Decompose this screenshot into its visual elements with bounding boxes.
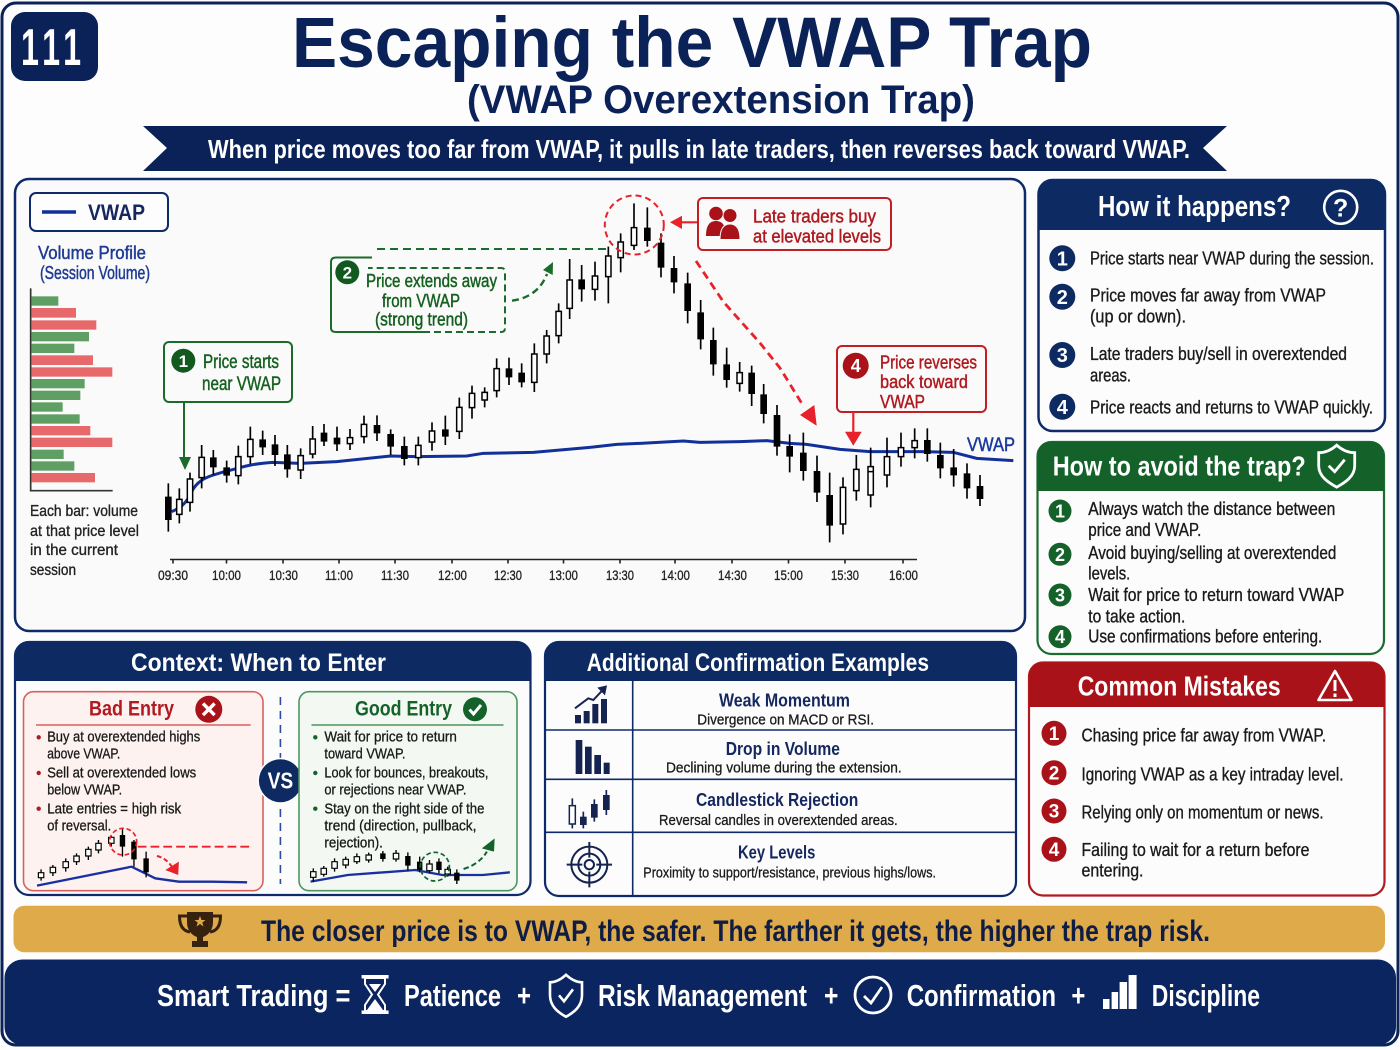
- card: good entry: or rejections near VWAP.: [324, 782, 466, 798]
- card: good entry: [299, 692, 517, 891]
- mistakes list: Ignoring VWAP as a key intraday level.: [1082, 765, 1344, 785]
- steps list: (up or down).: [1090, 307, 1186, 327]
- callout 4: price reverses back toward VWAP: 4: [851, 356, 861, 376]
- callout 4: price reverses back toward VWAP: VWAP: [880, 392, 925, 412]
- avoid list: Avoid buying/selling at overextended: [1088, 543, 1336, 563]
- panel: common mistakes: [1029, 662, 1384, 896]
- volume profile caption: Each bar: volume: [30, 503, 138, 520]
- row: weak momentum: Weak Momentum: [719, 691, 850, 711]
- heading: How it happens?: [1098, 191, 1291, 223]
- card: bad entry: below VWAP.: [47, 782, 122, 798]
- formula text: Discipline: [1152, 978, 1260, 1013]
- icon: hourglass: [362, 975, 389, 1014]
- legend: VWAP line: VWAP: [88, 200, 145, 225]
- mistakes list: [1042, 721, 1344, 881]
- card: good entry: rejection).: [324, 835, 383, 851]
- mini chart: good entry: [311, 838, 510, 884]
- avoid list: to take action.: [1088, 606, 1185, 626]
- steps list: Price moves far away from VWAP: [1090, 286, 1326, 306]
- arrow from callout 4 down to VWAP: [845, 412, 862, 446]
- formula text: Smart Trading =: [157, 978, 350, 1013]
- avoid list: [1048, 499, 1344, 648]
- panel: context, when to enter: [15, 642, 530, 895]
- footer: smart trading formula: [4, 960, 1396, 1045]
- heading: Context: When to Enter: [131, 649, 386, 677]
- icon: check circle: [855, 977, 891, 1013]
- time axis: 12:30: [494, 567, 522, 583]
- icon: shield with check: [1319, 445, 1355, 487]
- time axis: 11:00: [325, 567, 353, 583]
- time axis: 15:00: [774, 567, 803, 583]
- arrow from callout 1 to first candles: [179, 402, 191, 470]
- formula text: +: [824, 978, 838, 1013]
- legend: VWAP line: [30, 193, 168, 231]
- volume profile bars: [31, 288, 113, 491]
- time axis: 10:00: [212, 567, 241, 583]
- badge: number 111: [11, 12, 98, 81]
- icon: question mark: [1324, 191, 1357, 224]
- time axis: 16:00: [889, 567, 918, 583]
- row: candlestick rejection: [659, 790, 898, 829]
- callout: late traders buy at elevated levels: [698, 198, 891, 250]
- card: bad entry: Late entries = high risk: [47, 801, 182, 817]
- time axis: 10:30: [269, 567, 298, 583]
- mistakes list: 4: [1049, 840, 1060, 861]
- volume profile caption: in the current: [30, 542, 119, 559]
- steps list: 2: [1057, 287, 1068, 309]
- card: good entry: Wait for price to return: [324, 730, 457, 746]
- card: bad entry: Bad Entry: [89, 698, 174, 721]
- takeaway text: The closer price is to VWAP, the safer. The farther it gets, the higher the trap risk.: [261, 915, 1210, 948]
- icon: shield with check: [550, 975, 582, 1017]
- heading: Additional Confirmation Examples: [587, 649, 929, 677]
- time axis: 13:30: [606, 567, 634, 583]
- panel: VWAP price chart: [15, 179, 1025, 631]
- callout 2: price extends away from VWAP: (strong trend): [375, 310, 468, 330]
- icon: candlesticks: [569, 790, 610, 828]
- dashed circle around the peak: [605, 196, 664, 254]
- avoid list: 3: [1055, 586, 1065, 606]
- mistakes list: Chasing price far away from VWAP.: [1082, 726, 1326, 746]
- row: weak momentum: Divergence on MACD or RSI.: [697, 711, 874, 728]
- mistakes list: 3: [1049, 802, 1059, 823]
- callout 1: price starts near VWAP: 1: [179, 352, 188, 371]
- gold takeaway banner: [14, 906, 1385, 952]
- candlesticks, morning to midday: [165, 259, 585, 532]
- steps list: 3: [1057, 345, 1068, 367]
- volume profile caption: session: [30, 562, 76, 579]
- steps list: 1: [1057, 248, 1068, 270]
- avoid list: Wait for price to return toward VWAP: [1088, 585, 1344, 605]
- callout 1: price starts near VWAP: [164, 342, 292, 402]
- callout 2: price extends away from VWAP: [331, 249, 611, 332]
- mistakes list: 2: [1049, 764, 1059, 784]
- callout 2: price extends away from VWAP: from VWAP: [382, 291, 460, 311]
- time axis: 11:30: [381, 567, 409, 583]
- time axis: 14:30: [718, 567, 747, 583]
- volume profile heading: [38, 243, 150, 283]
- card: bad entry: Buy at overextended highs: [47, 730, 200, 746]
- icon: trophy: [180, 912, 220, 947]
- avoid list: Always watch the distance between: [1088, 499, 1335, 519]
- formula text: +: [517, 978, 531, 1013]
- panel: how to avoid the trap: [1038, 442, 1384, 654]
- avoid list: 2: [1055, 545, 1065, 565]
- icon: falling volume bars: [576, 740, 610, 774]
- arrow pointing to peak: [670, 216, 698, 229]
- mistakes list: 1: [1049, 724, 1060, 745]
- callout: late traders buy at elevated levels: Late traders buy: [753, 207, 876, 227]
- time axis: 14:00: [661, 567, 690, 583]
- formula text: Risk Management: [598, 978, 807, 1013]
- callout 2: price extends away from VWAP: 2: [343, 264, 352, 282]
- volume profile heading: Volume Profile: [38, 243, 146, 263]
- icon: target: [567, 842, 612, 887]
- row: weak momentum: [697, 691, 874, 728]
- card: good entry: Look for bounces, breakouts,: [324, 765, 488, 781]
- curved dashed arrow up: [512, 262, 553, 301]
- formula text: +: [1071, 978, 1085, 1013]
- VS divider: VS: [268, 768, 293, 794]
- avoid list: levels.: [1088, 563, 1130, 583]
- card: good entry: Good Entry: [355, 698, 452, 721]
- panel: additional confirmation examples: [545, 642, 1016, 896]
- avoid list: price and VWAP.: [1088, 520, 1201, 540]
- callout 4: price reverses back toward VWAP: back toward: [880, 372, 968, 392]
- row: key levels: Proximity to support/resistance, previous highs/lows.: [643, 865, 936, 882]
- VS divider: [257, 697, 303, 884]
- steps list: [1049, 245, 1374, 420]
- mistakes list: Failing to wait for a return before: [1082, 840, 1310, 860]
- card: bad entry: [24, 692, 263, 891]
- callout 1: price starts near VWAP: near VWAP: [202, 374, 281, 395]
- card: bad entry: Sell at overextended lows: [47, 765, 196, 781]
- icon: two traders: [706, 207, 740, 240]
- icon: question mark: ?: [1333, 194, 1348, 222]
- row: drop in volume: [666, 739, 902, 777]
- icon: warning triangle: [1318, 671, 1352, 700]
- callout 2: price extends away from VWAP: Price extends away: [366, 271, 497, 291]
- card: bad entry: above VWAP.: [47, 746, 120, 762]
- row: drop in volume: Declining volume during the extension.: [666, 760, 902, 777]
- card: bad entry: of reversal.: [47, 819, 111, 835]
- steps list: 4: [1057, 397, 1069, 419]
- icon: check: [463, 697, 487, 721]
- icon: cross: [195, 696, 222, 723]
- VWAP line label: VWAP: [967, 435, 1015, 456]
- time axis: 13:00: [549, 567, 578, 583]
- icon: rising bars: [1103, 975, 1137, 1009]
- badge: number 111: 111: [21, 19, 81, 77]
- time axis: 12:00: [438, 567, 467, 583]
- card: good entry: toward VWAP.: [324, 746, 405, 762]
- row: candlestick rejection: Reversal candles in overextended areas.: [659, 812, 898, 829]
- card: good entry: trend (direction, pullback,: [324, 819, 476, 835]
- formula text: Patience: [404, 978, 501, 1013]
- VWAP line, left half: [172, 447, 590, 512]
- steps list: Late traders buy/sell in overextended: [1090, 344, 1347, 364]
- callout 4: price reverses back toward VWAP: Price reverses: [880, 352, 977, 372]
- red dashed arrow: price falling: [696, 261, 817, 426]
- avoid list: 4: [1055, 627, 1065, 647]
- mistakes list: entering.: [1082, 861, 1144, 881]
- row: key levels: Key Levels: [738, 842, 815, 862]
- callout 1: price starts near VWAP: Price starts: [203, 352, 279, 373]
- card: good entry: Stay on the right side of the: [324, 801, 484, 817]
- formula text: [157, 978, 1260, 1013]
- icon: rising bars: [575, 685, 607, 723]
- callout: late traders buy at elevated levels: at elevated levels: [753, 226, 881, 246]
- time axis: 15:30: [831, 567, 859, 583]
- volume profile caption: [30, 503, 139, 579]
- row: candlestick rejection: Candlestick Rejection: [696, 790, 858, 810]
- row: drop in volume: Drop in Volume: [726, 739, 840, 759]
- subtitle: (VWAP Overextension Trap): [467, 78, 975, 122]
- VWAP line, right half: [590, 441, 1013, 461]
- avoid list: 1: [1055, 502, 1065, 522]
- volume profile heading: (Session Volume): [40, 263, 150, 283]
- ribbon banner: definition: When price moves too far from VWAP, it pulls in late traders, then reverses back toward VWAP.: [208, 134, 1190, 164]
- heading: Common Mistakes: [1078, 671, 1281, 702]
- formula text: Confirmation: [907, 978, 1056, 1013]
- time axis: [158, 560, 918, 583]
- candlesticks, peak to close: [592, 203, 983, 542]
- panel: how it happens: [1038, 180, 1385, 431]
- mini chart: bad entry: [37, 828, 250, 886]
- title: Escaping the VWAP Trap: [292, 4, 1092, 83]
- callout 4: price reverses back toward VWAP: [837, 346, 986, 412]
- row: key levels: [643, 842, 936, 882]
- mistakes list: Relying only on momentum or news.: [1082, 802, 1324, 822]
- volume profile caption: at that price level: [30, 523, 139, 540]
- time axis: 09:30: [158, 567, 188, 583]
- heading: How to avoid the trap?: [1053, 451, 1306, 482]
- steps list: areas.: [1090, 366, 1131, 386]
- ribbon banner: definition: [143, 126, 1227, 171]
- avoid list: Use confirmations before entering.: [1088, 626, 1322, 646]
